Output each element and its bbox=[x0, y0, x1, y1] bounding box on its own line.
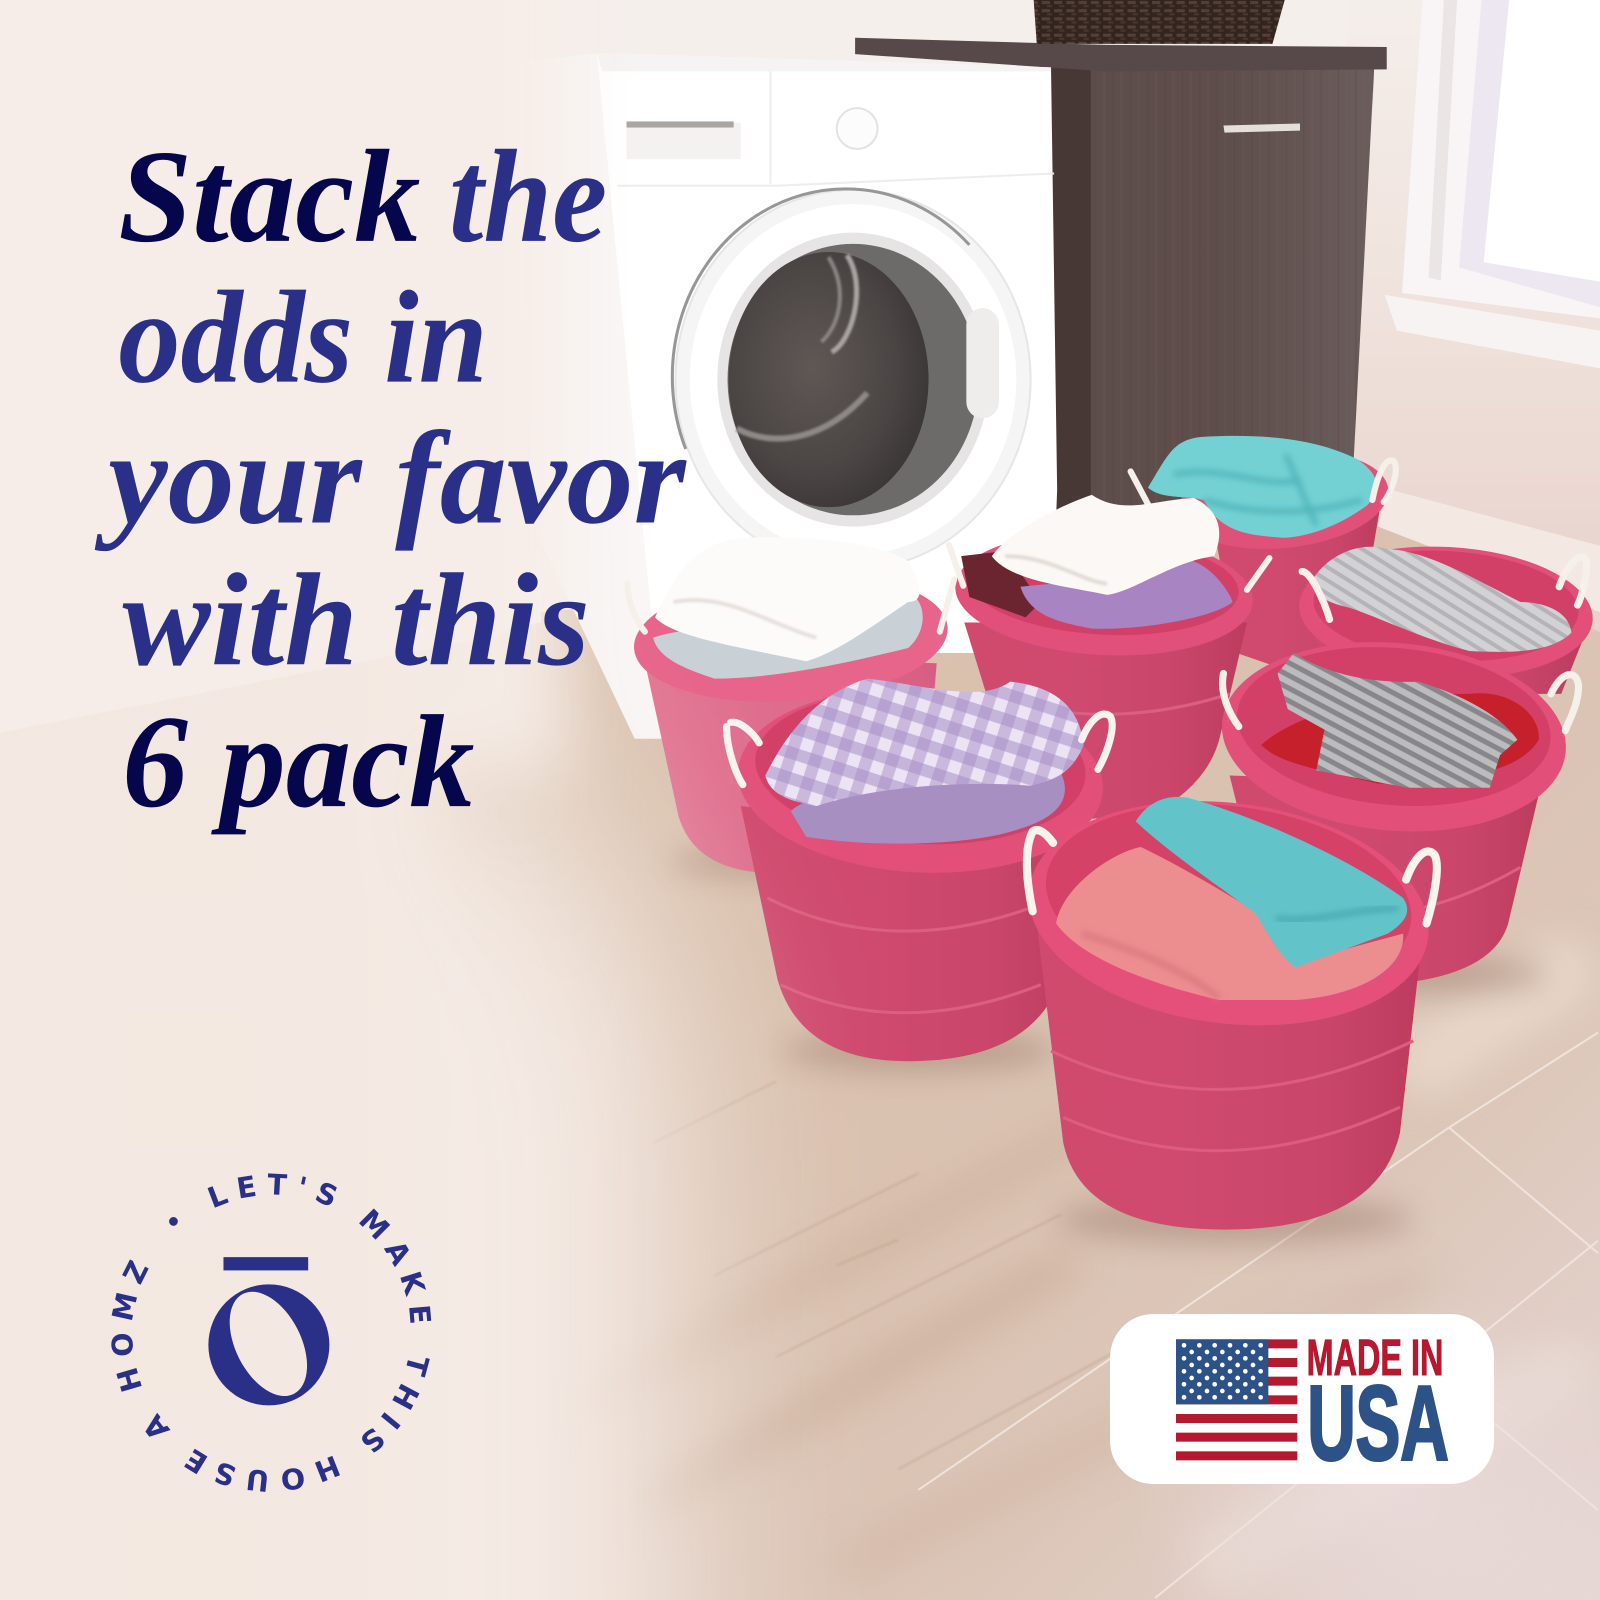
rope handles bbox=[1131, 460, 1396, 506]
detergent drawer bbox=[627, 121, 741, 159]
dial bbox=[837, 108, 878, 149]
wicker basket bbox=[1034, 0, 1285, 44]
gingham shirt bbox=[765, 679, 1084, 806]
made in usa badge bbox=[1110, 1314, 1494, 1484]
line 1: Stack bbox=[118, 123, 420, 270]
washing machine bbox=[505, 53, 1057, 739]
door glass bbox=[728, 244, 979, 515]
bucket: far back teal bbox=[1131, 436, 1396, 673]
line 4: with this bbox=[122, 546, 590, 693]
line 2: odds in bbox=[118, 264, 488, 411]
separator dot bbox=[169, 1217, 178, 1226]
line 3: your favor bbox=[94, 404, 687, 551]
rope handles bbox=[1302, 557, 1586, 619]
door latch bbox=[966, 308, 999, 418]
window sill bbox=[1385, 295, 1600, 368]
faded floor tint bbox=[0, 624, 653, 1600]
made in text: MADE IN bbox=[1307, 1329, 1443, 1386]
white pill bbox=[1110, 1314, 1494, 1484]
striped towel bbox=[1311, 547, 1571, 652]
american flag bbox=[1176, 1339, 1297, 1460]
purple sweater bbox=[791, 773, 1065, 844]
logo ring bbox=[208, 1279, 329, 1409]
floor shadows bbox=[668, 848, 1546, 1244]
soft light lower right bbox=[1122, 1224, 1600, 1600]
window bbox=[1385, 0, 1600, 368]
cabinet handle bbox=[1223, 123, 1300, 133]
bucket: back center white bbox=[949, 495, 1269, 821]
rope handles bbox=[628, 580, 954, 632]
right wall bbox=[1347, 0, 1600, 633]
red cloth bbox=[1261, 693, 1539, 784]
window frame bbox=[1459, 0, 1600, 307]
logo bar bbox=[223, 1257, 308, 1270]
right baseboard bbox=[1378, 489, 1600, 612]
bucket: right front gray bbox=[1214, 628, 1579, 982]
bucket: back left white bbox=[628, 537, 954, 872]
bucket: front teal pink bbox=[1016, 779, 1442, 1230]
door bbox=[672, 189, 1031, 569]
back wall bbox=[0, 0, 1367, 733]
logo badge bbox=[111, 1173, 432, 1492]
bucket: back right gray bbox=[1296, 539, 1596, 694]
rope handles bbox=[949, 545, 1269, 590]
cabinet body bbox=[1049, 61, 1374, 531]
line 5: 6 pack bbox=[122, 688, 474, 835]
teal towel bbox=[1148, 436, 1377, 538]
white towel bbox=[655, 537, 920, 661]
white towel bbox=[992, 495, 1219, 595]
plaid cloth bbox=[961, 551, 1041, 617]
cabinet bbox=[855, 0, 1387, 531]
rope handles bbox=[1223, 673, 1579, 731]
window glass bbox=[1484, 0, 1600, 282]
rope handles bbox=[727, 714, 1112, 785]
line 1: the bbox=[449, 123, 607, 270]
usa text: USA bbox=[1307, 1364, 1449, 1482]
line 1 bbox=[118, 123, 607, 270]
rope handles bbox=[1027, 830, 1437, 923]
cabinet top bbox=[855, 38, 1387, 71]
teal towel bbox=[1136, 797, 1407, 967]
left baseboard bbox=[0, 549, 541, 733]
striped sweater bbox=[1278, 653, 1517, 788]
washer front bbox=[597, 53, 1057, 739]
pink towel bbox=[1056, 847, 1403, 1000]
left fade overlay bbox=[0, 58, 808, 1600]
purple cloth bbox=[1020, 559, 1233, 629]
headline bbox=[94, 123, 687, 835]
window casing bbox=[1402, 0, 1600, 318]
bucket: front left lavender bbox=[727, 679, 1112, 1061]
circular slogan: LET'S MAKE THIS HOUSE A HOMZ bbox=[111, 1173, 432, 1492]
gray blanket bbox=[653, 592, 923, 679]
washer side bbox=[505, 53, 663, 739]
